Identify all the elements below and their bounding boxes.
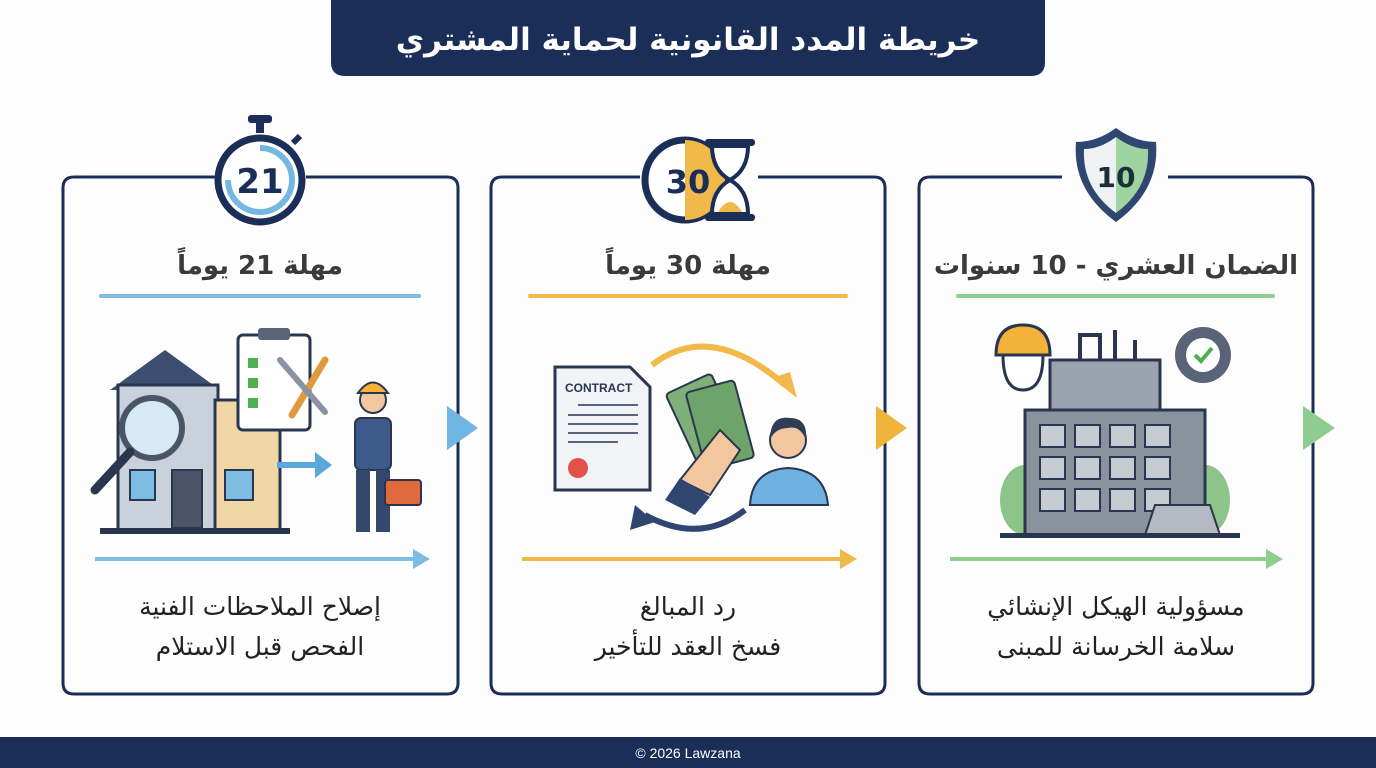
arrow: yellow — [876, 406, 907, 450]
heading: 30 days: مهلة 30 يوماً — [605, 246, 771, 281]
heading: 10 years: الضمان العشري - 10 سنوات — [934, 251, 1298, 281]
text: 30 days description — [593, 592, 781, 662]
arrow: blue — [447, 406, 478, 450]
icon: stopwatch 21: 21 — [236, 162, 284, 202]
text: 10 years description: سلامة الخرسانة للمبنى — [997, 632, 1235, 661]
icon: shield 10 — [1076, 128, 1156, 222]
icon: clock 30 and hourglass: 30 — [666, 163, 710, 201]
heading: 21 days: مهلة 21 يوماً — [177, 246, 343, 281]
panel: 21 days — [63, 115, 458, 694]
illustration: building structure — [996, 325, 1240, 538]
icon: shield 10: 10 — [1097, 161, 1135, 194]
illustration: house inspection and worker — [95, 328, 421, 534]
title bar: خريطة المدد القانونية لحماية المشتري — [396, 22, 980, 58]
text: 21 days description: إصلاح الملاحظات الفنية — [139, 592, 381, 622]
arrow: green — [1303, 406, 1335, 450]
text: 21 days description — [139, 592, 381, 661]
icon: clock 30 and hourglass — [645, 139, 755, 221]
icon: stopwatch 21 — [218, 115, 302, 222]
panel: 10 years — [919, 128, 1313, 694]
text: 21 days description: الفحص قبل الاستلام — [156, 632, 364, 661]
illustration: contract refund: CONTRACT — [565, 381, 633, 395]
panel: 30 days — [491, 139, 885, 694]
text: 30 days description: فسخ العقد للتأخير — [593, 628, 781, 662]
illustration: contract refund — [555, 347, 828, 530]
footer: © 2026 Lawzana — [635, 745, 741, 761]
title bar — [331, 0, 1045, 76]
text: 10 years description: مسؤولية الهيكل الإنشائي — [987, 592, 1245, 622]
text: 30 days description: رد المبالغ — [640, 592, 736, 622]
text: 10 years description — [987, 592, 1245, 661]
footer — [0, 737, 1376, 768]
